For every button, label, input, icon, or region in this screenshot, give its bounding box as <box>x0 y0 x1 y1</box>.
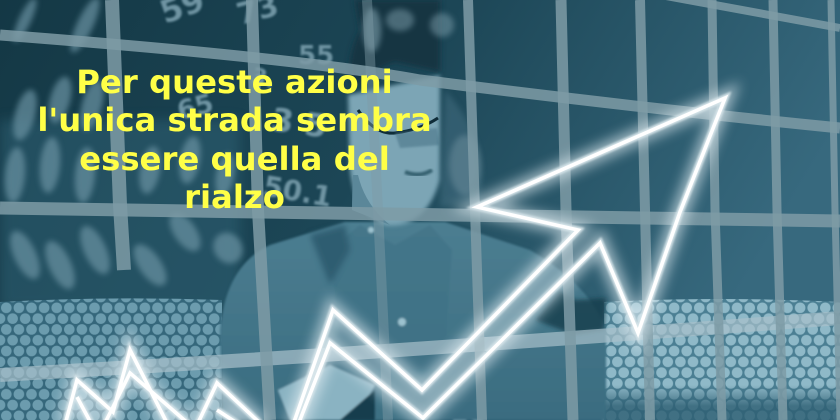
headline: rialzo <box>184 178 285 216</box>
man: head, hair and glasses <box>348 0 482 225</box>
headline: Per queste azioni <box>76 63 393 101</box>
honeycomb band, left <box>0 298 222 420</box>
blurred digits on the screen: 3. <box>248 64 278 94</box>
lighter lower-left screen tone <box>0 120 240 310</box>
blurred digits on the screen: 79.09 <box>491 360 601 420</box>
blurred digits on the screen: 50.1 <box>261 169 335 214</box>
blurred digits on the screen <box>155 0 640 420</box>
dark figure fragment, right of shirt <box>535 290 606 335</box>
rising arrow chart line <box>65 98 725 420</box>
blurred digits on the screen: 83 <box>598 355 640 392</box>
headline: essere quella del <box>79 140 390 178</box>
headline <box>37 63 432 216</box>
blurred digit streaks, left <box>3 0 249 293</box>
blurred digits on the screen: 55 <box>298 41 334 71</box>
blurred digits on the screen: 65 <box>174 88 217 127</box>
blurred digits on the screen: 43.8 <box>505 331 569 371</box>
blurred digits on the screen: 3 5 <box>269 100 329 146</box>
honeycomb band, right <box>604 299 840 420</box>
headline: l'unica strada sembra <box>37 101 432 139</box>
man: shirt and torso <box>220 222 606 420</box>
